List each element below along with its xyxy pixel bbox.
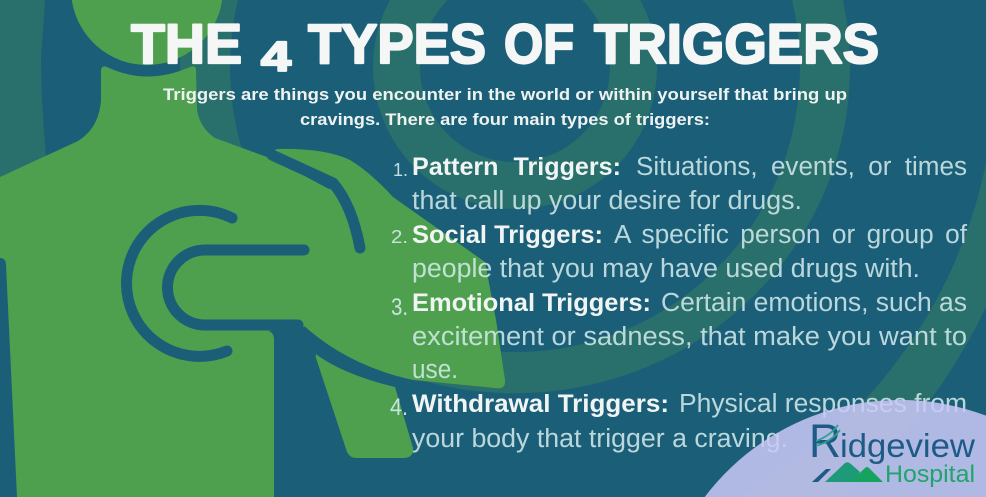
shoulder line	[272, 155, 360, 248]
item 3: emotional triggers: 3.	[391, 294, 408, 321]
item 3: emotional triggers: use.	[412, 356, 458, 384]
item 3: emotional triggers: Certain emotions, such as	[661, 289, 967, 317]
item 1: pattern triggers: that call up your desire for drugs.	[412, 187, 802, 215]
item 4: withdrawal triggers: your body that trigger a craving.	[412, 425, 788, 453]
head	[72, 0, 222, 65]
intro text: Triggers are things you encounter in the world or within yourself that bring up	[163, 85, 847, 104]
item 2: social triggers: 2.	[391, 227, 408, 247]
item 1: pattern triggers: Situations, events, or times	[636, 153, 967, 181]
human figure	[0, 0, 505, 497]
item 4: withdrawal triggers	[390, 390, 967, 453]
item 1: pattern triggers: 1.	[393, 160, 408, 180]
item 1: pattern triggers	[393, 153, 967, 215]
item 3: emotional triggers: Emotional Triggers:	[412, 289, 651, 317]
title: TRIGGERS	[594, 12, 879, 75]
title: TYPES	[308, 12, 486, 75]
item 2: social triggers	[391, 221, 968, 283]
title: OF	[504, 12, 574, 75]
outer chest arc	[127, 210, 232, 356]
list of triggers	[390, 153, 968, 453]
item 2: social triggers: people that you may have used drugs with.	[412, 255, 920, 283]
item 4: withdrawal triggers: Physical responses from	[679, 390, 967, 418]
arm and hand	[274, 149, 505, 388]
title: THE	[131, 12, 242, 75]
item 4: withdrawal triggers: Withdrawal Triggers:	[412, 390, 669, 418]
torso	[0, 66, 356, 497]
item 2: social triggers: Social Triggers:	[412, 221, 603, 249]
item 4: withdrawal triggers: 4.	[390, 394, 408, 421]
inner hand line	[168, 250, 304, 325]
intro text: cravings. There are four main types of triggers:	[300, 110, 710, 129]
title	[131, 12, 879, 80]
title: 4	[261, 33, 292, 80]
logo: Ridgeview Hospital	[809, 414, 975, 488]
forearm	[316, 354, 413, 458]
logo wordmark: R	[809, 414, 841, 467]
item 3: emotional triggers	[391, 289, 967, 384]
logo: Ridgeview Hospital: Hospital	[885, 461, 975, 488]
logo: Ridgeview Hospital: idgeview	[840, 427, 975, 464]
logo mountains	[812, 462, 883, 482]
item 3: emotional triggers: excitement or sadness, that make you want to	[412, 323, 967, 351]
item 1: pattern triggers: Pattern Triggers:	[412, 153, 621, 181]
logo backdrop circle	[705, 400, 986, 497]
intro text	[163, 85, 847, 129]
item 2: social triggers: A specific person or group of	[614, 221, 968, 249]
logo swoosh	[816, 425, 840, 446]
